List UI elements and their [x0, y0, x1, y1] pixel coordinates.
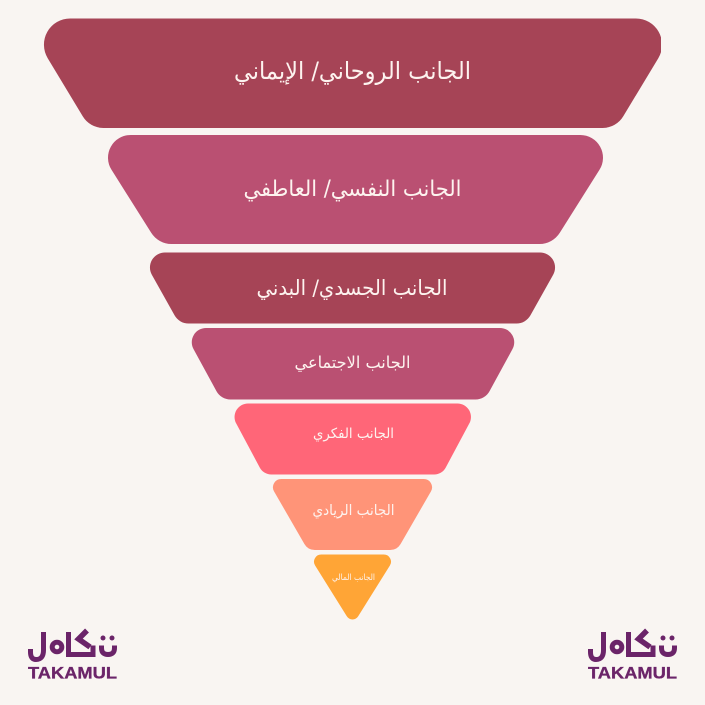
band 5: intellectual — [235, 404, 471, 475]
band 1: spiritual: الجانب الروحاني/ الإيماني — [234, 57, 471, 85]
band 4: social — [192, 328, 514, 400]
band 3: physical — [150, 252, 555, 324]
logo: left Takamul: TAKAMUL — [28, 664, 117, 682]
logo: right Takamul: TAKAMUL — [588, 664, 677, 682]
band 2: emotional — [108, 135, 603, 244]
band 5: intellectual: الجانب الفكري — [313, 426, 394, 442]
band 3: physical: الجانب الجسدي/ البدني — [256, 276, 448, 300]
band 6: entrepreneurial — [273, 479, 432, 550]
band 2: emotional: الجانب النفسي/ العاطفي — [244, 177, 462, 202]
band 1: spiritual — [44, 18, 662, 128]
band 6: entrepreneurial: الجانب الريادي — [312, 503, 394, 519]
logo: right Takamul — [588, 630, 677, 682]
band 7: financial — [314, 554, 391, 619]
band 7: financial: الجانب المالي — [332, 573, 375, 583]
band 4: social: الجانب الاجتماعي — [294, 353, 410, 373]
funnel — [44, 18, 662, 619]
logo: left Takamul — [28, 630, 117, 682]
